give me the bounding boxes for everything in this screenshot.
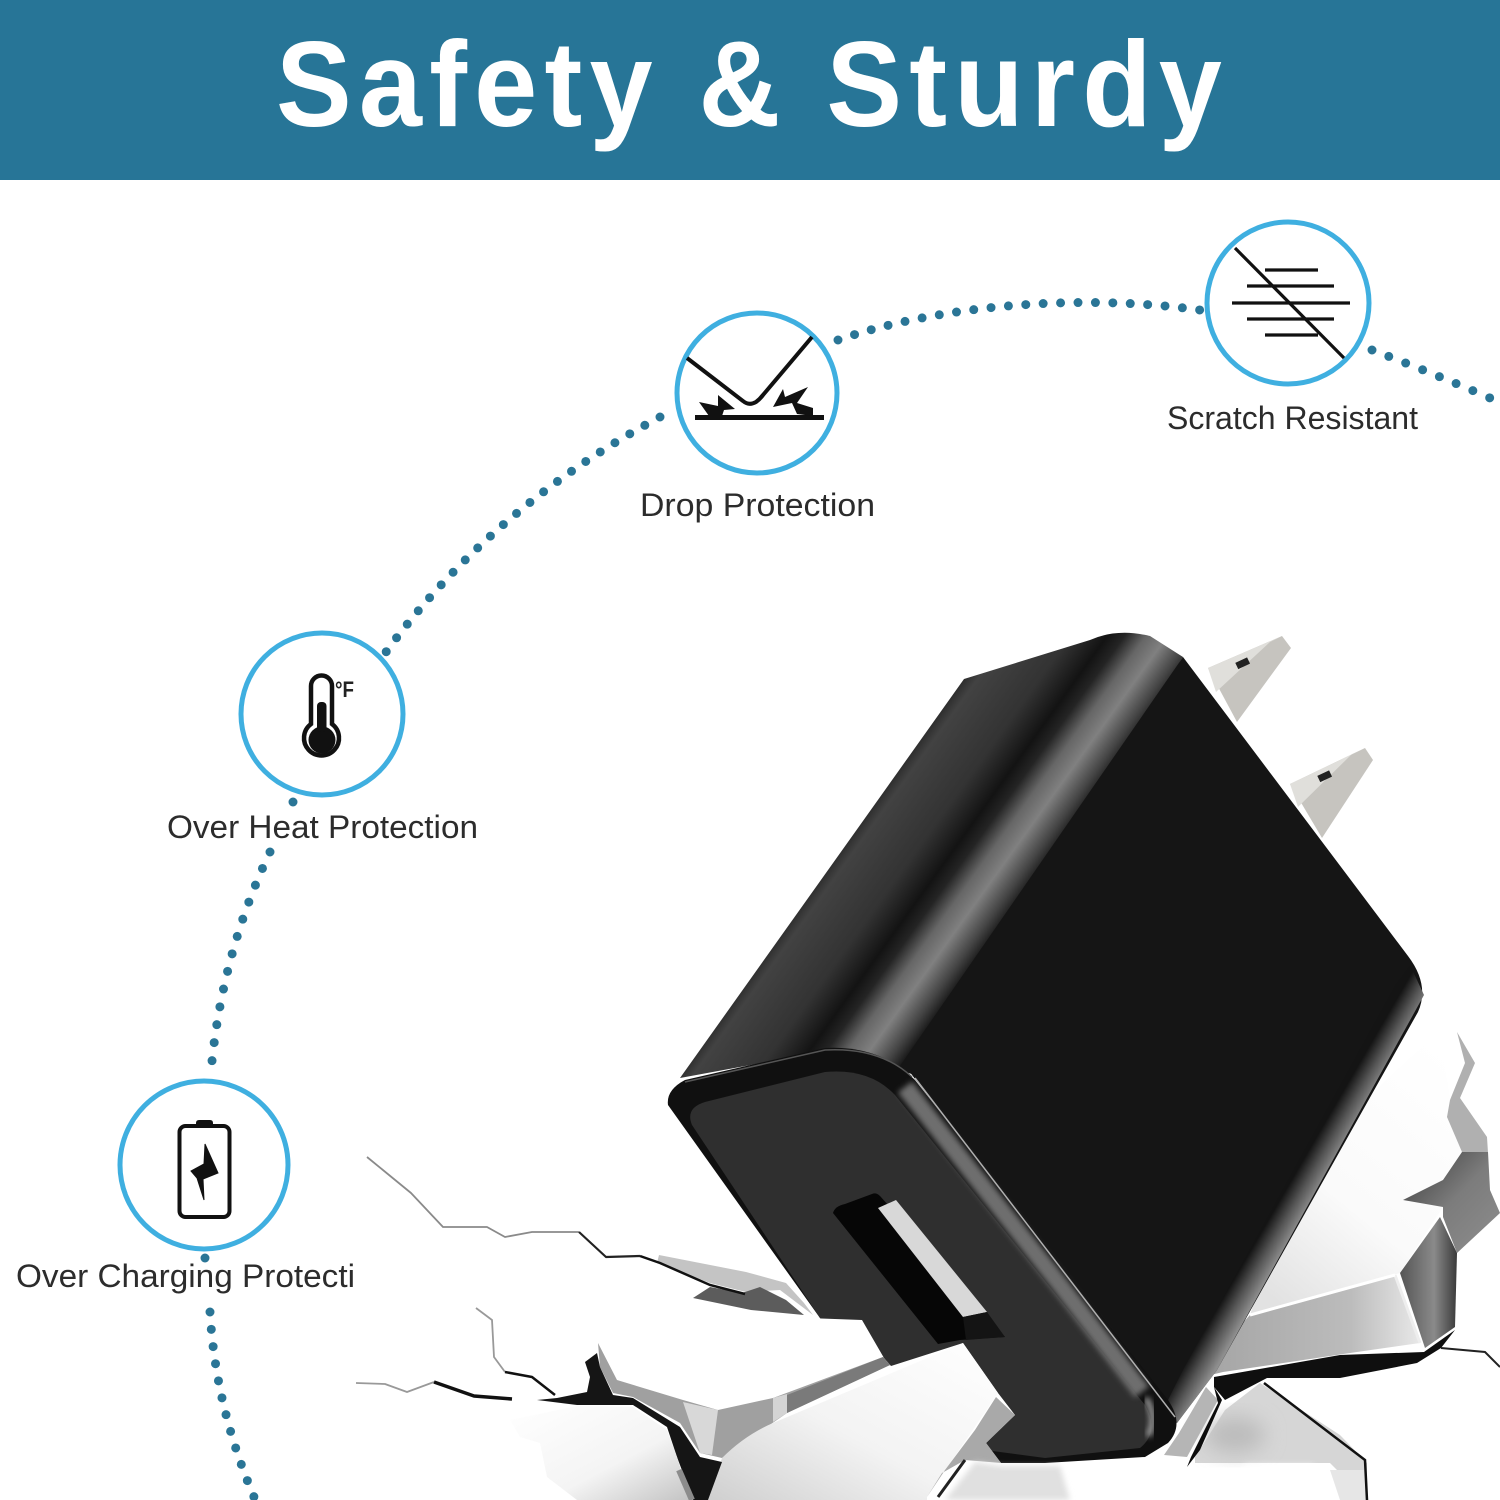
icon: thermometer: °F: [335, 677, 354, 702]
main lower white wall: [708, 1343, 998, 1500]
label: Drop Protection: [640, 487, 875, 523]
label: Over Heat Protection: [167, 809, 478, 845]
port rim highlights: [905, 1087, 1142, 1392]
gray patch on charger edge: [963, 1350, 976, 1376]
side face with highlight band: [680, 633, 1183, 1078]
background cracked wall shards right: [1107, 1030, 1500, 1500]
lower facets: [598, 1343, 890, 1458]
title: Safety & Sturdy: [276, 15, 1222, 152]
circle: [120, 1081, 288, 1249]
feature: scratch resistant: [1167, 222, 1418, 436]
upper shards: [657, 1255, 813, 1315]
icon: thermometer: [304, 676, 354, 756]
icon: scratch: [1232, 248, 1350, 358]
front face: [900, 657, 1422, 1423]
icon: drop impact: [687, 337, 824, 420]
prongs: [1208, 636, 1373, 838]
foreground cracked wall: [356, 1157, 1145, 1500]
dotted arc connector: [200, 302, 1490, 1497]
label: Over Charging Protecti: [16, 1258, 355, 1294]
black crack under charger: [1141, 1387, 1222, 1467]
feature: over charging protection: [16, 1081, 355, 1294]
gray strip below bevel: [1164, 1387, 1218, 1457]
label: Scratch Resistant: [1167, 400, 1418, 436]
icon: battery: [180, 1120, 230, 1217]
feature: drop protection: [640, 313, 875, 523]
circle: [1207, 222, 1369, 384]
port face: [668, 1048, 1176, 1463]
charger body: [668, 633, 1424, 1467]
thin cracks: [356, 1157, 640, 1399]
feature: over heat protection: [167, 633, 478, 845]
circle: [677, 313, 837, 473]
circle: [241, 633, 403, 795]
right strip shard: [927, 1397, 1015, 1497]
front lower-right bevel: [1168, 965, 1424, 1423]
wall white mask: [500, 1317, 1145, 1500]
header banner: [0, 0, 1500, 180]
usb port: [833, 1193, 1005, 1344]
left fragment: [510, 1406, 690, 1500]
black crack junction: [537, 1353, 722, 1500]
